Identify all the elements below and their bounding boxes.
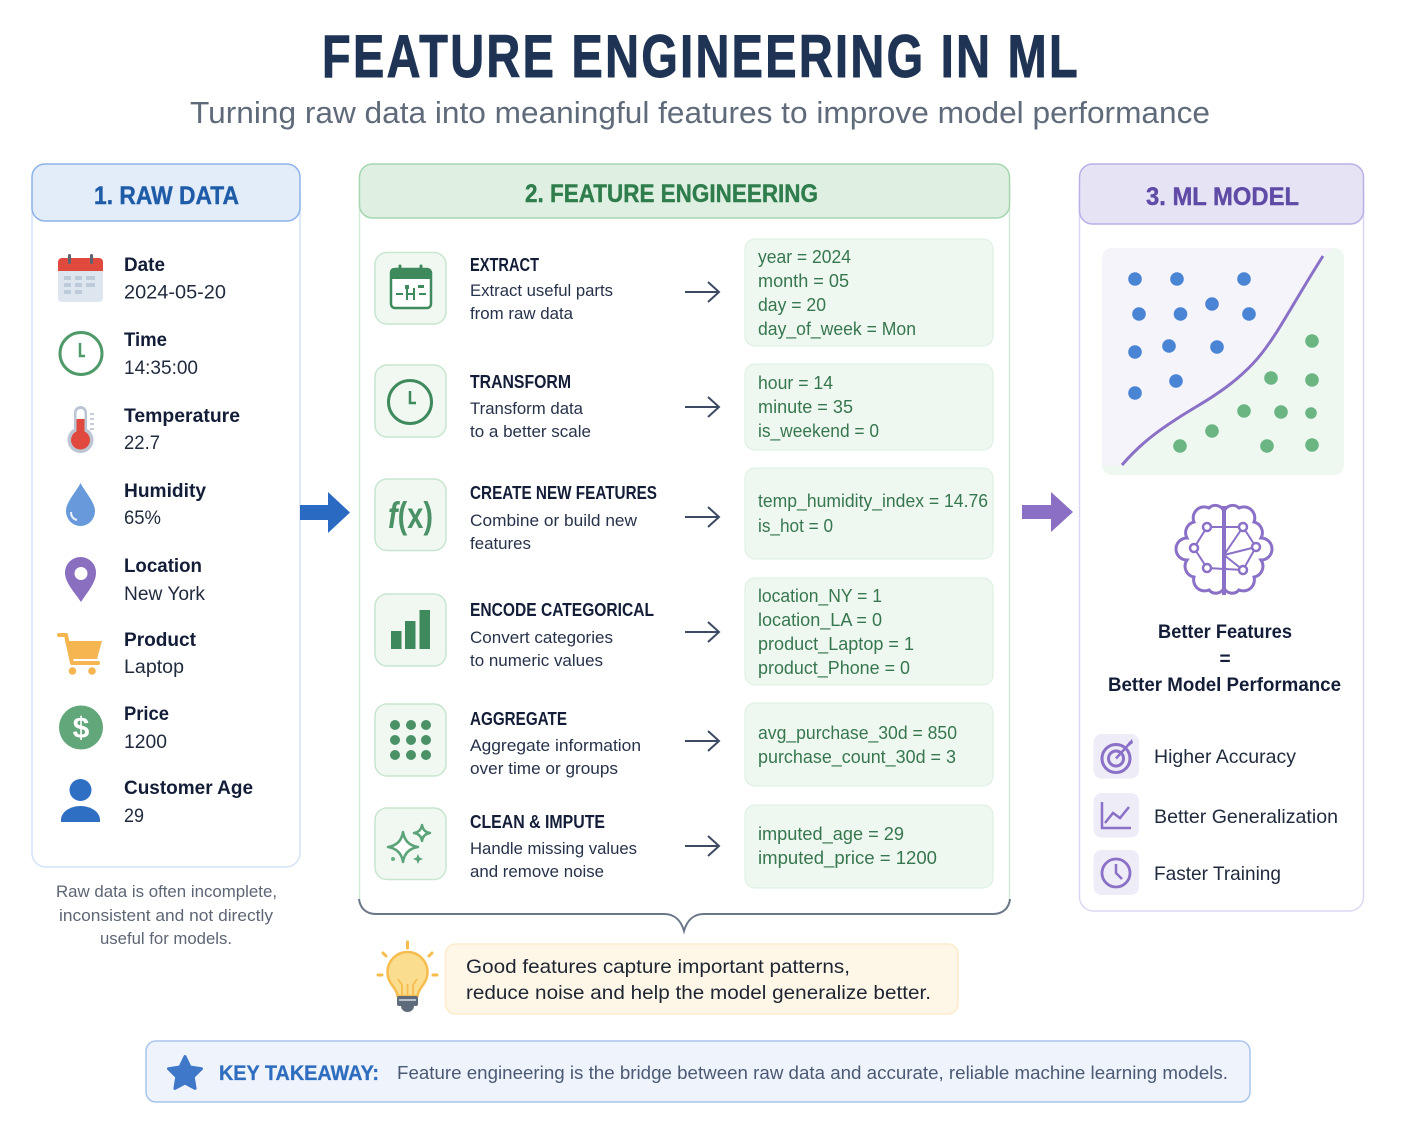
- item: location: Location: [124, 556, 202, 577]
- item: time: 14:35:00: [124, 358, 198, 379]
- row: create new features: [375, 468, 993, 559]
- benefit: faster training: Faster Training: [1154, 863, 1281, 885]
- text: create new features: features: [470, 534, 531, 553]
- text: better features equation: [1108, 622, 1341, 696]
- item: customer age: Customer Age: [124, 778, 253, 799]
- item: customer age: 29: [124, 806, 144, 827]
- benefit: better generalization: Better Generalization: [1154, 806, 1338, 828]
- panel: ml model: [1080, 164, 1364, 911]
- panel: raw data: [32, 164, 300, 867]
- icon: dollar coin: [59, 706, 103, 750]
- item: price: 1200: [124, 732, 167, 753]
- text: encode categorical: to numeric values: [470, 651, 603, 670]
- label: key takeaway: KEY TAKEAWAY:: [219, 1062, 379, 1085]
- icon: bar chart: [375, 594, 446, 666]
- icon: lightbulb: [378, 942, 437, 1012]
- output box: aggregate: avg_purchase_30d = 850: [758, 723, 957, 744]
- panel header: ml model: 3. ML MODEL: [1146, 183, 1299, 211]
- text: encode categorical: ENCODE CATEGORICAL: [470, 600, 654, 620]
- output box: transform: [745, 364, 993, 450]
- text: better features equation: =: [1219, 649, 1231, 670]
- icon: star: [168, 1056, 202, 1088]
- item: date: 2024-05-20: [124, 282, 226, 304]
- panel header: feature engineering: [360, 164, 1010, 218]
- icon: thermometer: [68, 406, 94, 453]
- arrow: feature engineering to ml model: [1022, 492, 1073, 532]
- item: temperature: Temperature: [124, 406, 240, 427]
- panel header: ml model: [1080, 164, 1364, 224]
- text: transform: [470, 372, 591, 441]
- item: date: [124, 255, 226, 304]
- icon: person: [61, 779, 100, 822]
- text: create new features: CREATE NEW FEATURES: [470, 483, 657, 503]
- text: aggregate: [470, 709, 641, 778]
- item: product: Product: [124, 630, 197, 651]
- icon: clock: [375, 365, 446, 437]
- item: temperature: [124, 406, 240, 454]
- text: aggregate: over time or groups: [470, 759, 618, 778]
- text: encode categorical: Convert categories: [470, 628, 613, 647]
- text: clean and impute: Handle missing values: [470, 839, 637, 858]
- text: extract: Extract useful parts: [470, 281, 613, 300]
- item: customer age: [124, 778, 253, 827]
- item: location: New York: [124, 584, 205, 605]
- panel: feature engineering: [359, 164, 1010, 931]
- benefit: better generalization: [1094, 793, 1338, 838]
- text: clean and impute: [470, 812, 637, 881]
- output box: create new features: temp_humidity_index = 14.76: [758, 491, 988, 512]
- title: FEATURE ENGINEERING IN ML: [322, 23, 1080, 90]
- item: humidity: Humidity: [124, 481, 206, 502]
- key takeaway banner: [146, 1041, 1250, 1102]
- note: raw data caption: useful for models.: [100, 930, 232, 948]
- output box: aggregate: [745, 703, 993, 786]
- text: aggregate: AGGREGATE: [470, 709, 567, 729]
- text: transform: Transform data: [470, 399, 584, 418]
- output box: extract: day_of_week = Mon: [758, 319, 916, 340]
- scatter chart: decision boundary: [1100, 240, 1344, 480]
- benefit: higher accuracy: [1094, 734, 1296, 778]
- note: raw data caption: inconsistent and not directly: [59, 907, 274, 925]
- row: encode categorical: [375, 578, 993, 685]
- benefit: higher accuracy: Higher Accuracy: [1154, 746, 1296, 768]
- icon: sparkles: [375, 808, 446, 880]
- item: humidity: [124, 481, 206, 529]
- text: extract: [470, 255, 613, 323]
- icon: calendar: [58, 254, 103, 302]
- item: time: Time: [124, 330, 167, 351]
- output box: create new features: [745, 468, 993, 559]
- output box: encode categorical: product_Laptop = 1: [758, 634, 914, 655]
- icon: brain: [1176, 505, 1272, 595]
- callout: good features: Good features capture important patterns,: [466, 956, 850, 978]
- output box: clean and impute: imputed_age = 29: [758, 824, 904, 845]
- output box: encode categorical: location_LA = 0: [758, 610, 882, 631]
- note: raw data caption: Raw data is often incomplete,: [56, 883, 277, 901]
- text: encode categorical: [470, 600, 654, 670]
- icon: water drop: [66, 483, 95, 526]
- panel header: feature engineering: 2. FEATURE ENGINEERING: [525, 180, 818, 208]
- arrow: [685, 507, 719, 527]
- text: extract: from raw data: [470, 304, 574, 323]
- row: extract: [375, 239, 993, 346]
- arrow: [685, 397, 719, 417]
- item: time: [124, 330, 198, 379]
- text: better features equation: Better Features: [1158, 622, 1292, 643]
- panel body: raw data: [32, 180, 300, 867]
- icon: f(x): [375, 479, 446, 550]
- text: better features equation: Better Model Performance: [1108, 675, 1341, 696]
- text: transform: to a better scale: [470, 422, 591, 441]
- icon: location pin: [65, 557, 96, 602]
- benefit: faster training: [1094, 850, 1281, 895]
- text: extract: EXTRACT: [470, 255, 539, 275]
- arrow: [685, 282, 719, 302]
- output box: aggregate: purchase_count_30d = 3: [758, 747, 956, 768]
- text: create new features: Combine or build new: [470, 511, 638, 530]
- arrow: [685, 731, 719, 751]
- arrow: [685, 622, 719, 642]
- item: price: Price: [124, 704, 169, 725]
- item: temperature: 22.7: [124, 433, 160, 454]
- output box: encode categorical: location_NY = 1: [758, 586, 882, 607]
- output box: extract: [745, 239, 993, 346]
- text: aggregate: Aggregate information: [470, 736, 641, 755]
- text: takeaway: Feature engineering is the bridge between raw data and accurate, reliable machine learning models.: [397, 1063, 1228, 1083]
- panel body: ml model: [1080, 180, 1364, 911]
- output box: transform: is_weekend = 0: [758, 421, 879, 442]
- row: clean and impute: [375, 805, 993, 888]
- panel header: raw data: 1. RAW DATA: [94, 182, 239, 210]
- text: clean and impute: and remove noise: [470, 862, 604, 881]
- callout: good features: [446, 944, 958, 1014]
- item: date: Date: [124, 255, 165, 276]
- icon: dollar coin: $: [73, 712, 90, 745]
- callout: good features: reduce noise and help the model generalize better.: [466, 982, 931, 1004]
- arrow: raw data to feature engineering: [300, 492, 350, 533]
- text: create new features: [470, 483, 657, 553]
- item: price: [124, 704, 169, 753]
- arrow: [685, 836, 719, 856]
- row: aggregate: [375, 703, 993, 786]
- output box: encode categorical: product_Phone = 0: [758, 658, 910, 679]
- panel header: raw data: [32, 164, 300, 221]
- icon: f(x): f(x): [388, 495, 433, 536]
- output box: clean and impute: imputed_price = 1200: [758, 848, 937, 869]
- output box: extract: year = 2024: [758, 247, 851, 267]
- icon: shopping cart: [59, 635, 102, 675]
- output box: clean and impute: [745, 805, 993, 888]
- item: product: Laptop: [124, 657, 184, 678]
- output box: extract: month = 05: [758, 271, 849, 291]
- output box: create new features: is_hot = 0: [758, 516, 833, 537]
- output box: transform: minute = 35: [758, 397, 853, 417]
- output box: extract: day = 20: [758, 295, 826, 315]
- item: location: [124, 556, 205, 605]
- output box: encode categorical: [745, 578, 993, 685]
- icon: calendar: [375, 252, 446, 324]
- text: transform: TRANSFORM: [470, 372, 571, 392]
- subtitle: Turning raw data into meaningful features to improve model performance: [190, 95, 1210, 130]
- icon: clock: [60, 332, 102, 374]
- item: humidity: 65%: [124, 508, 161, 529]
- panel body: feature engineering: [360, 180, 1010, 900]
- text: clean and impute: CLEAN & IMPUTE: [470, 812, 605, 832]
- item: product: [124, 630, 197, 678]
- output box: transform: hour = 14: [758, 373, 833, 393]
- bracket: [359, 899, 1010, 931]
- row: transform: [375, 364, 993, 450]
- note: raw data caption: [56, 883, 277, 948]
- icon: dot grid: [375, 704, 446, 776]
